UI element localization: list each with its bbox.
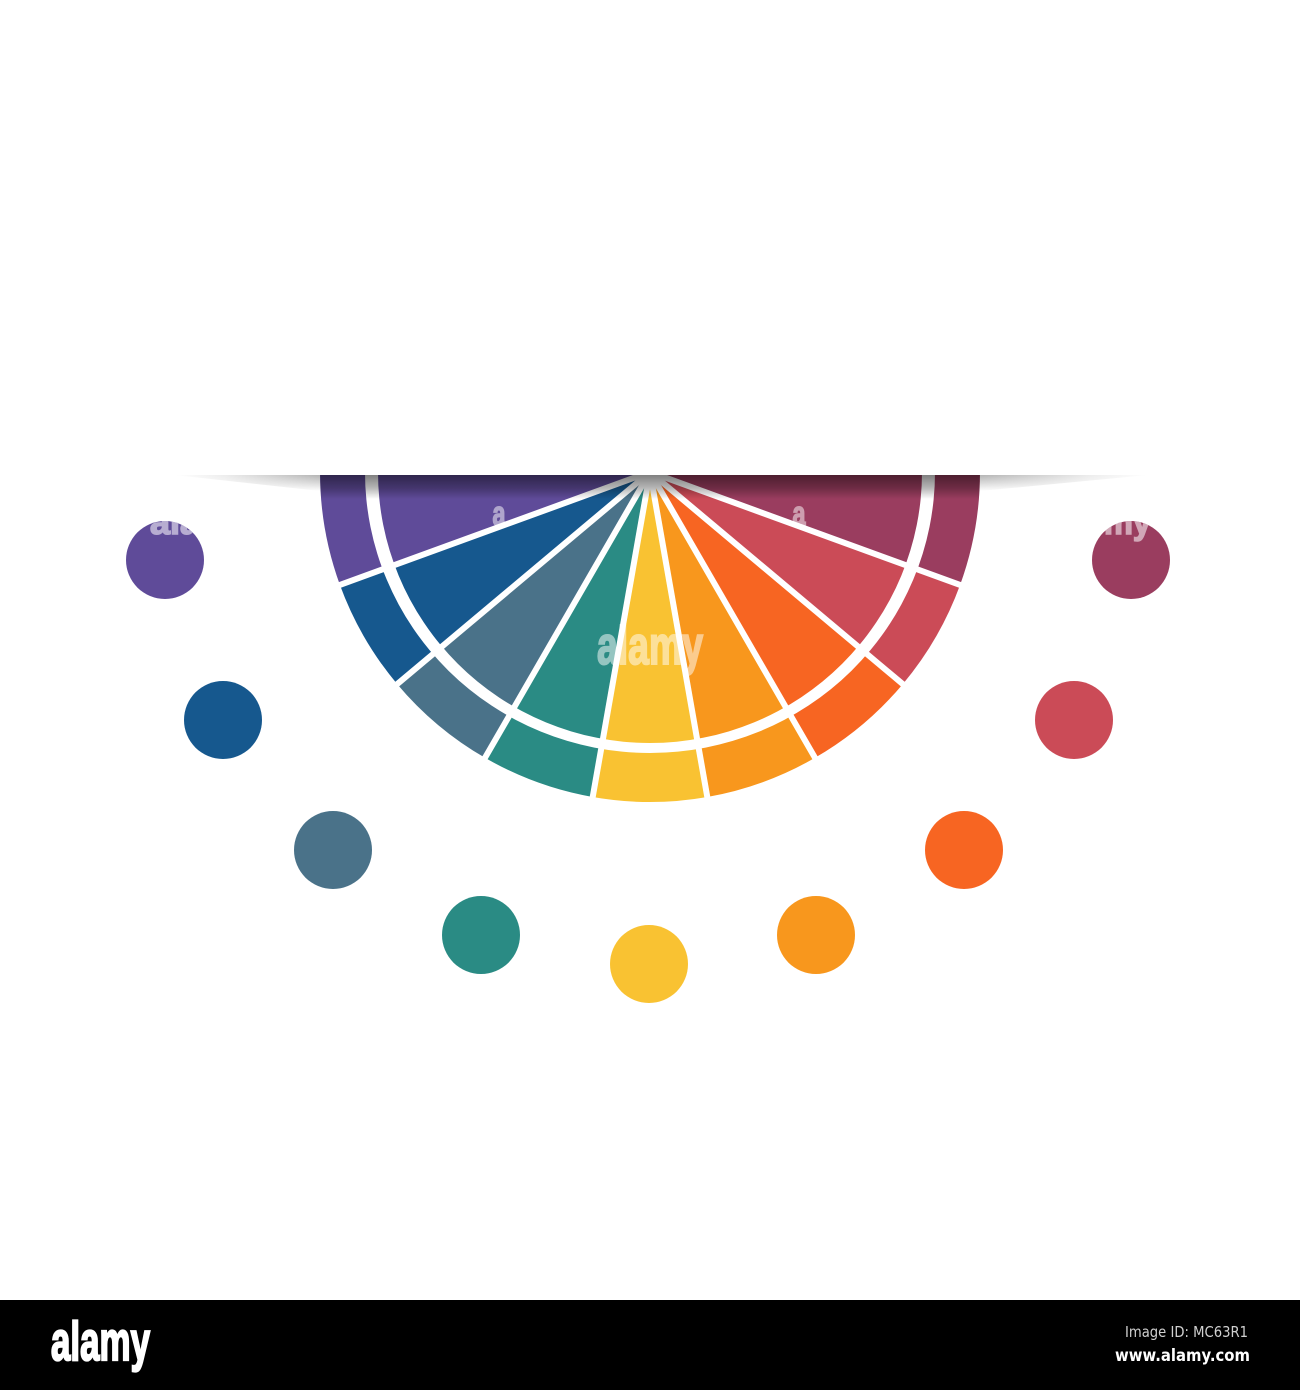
white cover panel <box>0 0 1300 475</box>
segment: orange <box>650 472 903 758</box>
segment: maroon <box>650 472 980 585</box>
dot: yellow <box>610 925 688 1003</box>
semicircular wheel <box>320 475 980 802</box>
ring separator <box>365 191 935 753</box>
footer bar <box>0 1300 1300 1390</box>
footer logo: alamy <box>51 1310 150 1372</box>
dot: purple: ala <box>150 504 201 542</box>
segment: amber <box>650 472 815 797</box>
dot: amber <box>777 896 855 974</box>
shadow on wheel <box>320 475 980 499</box>
segment: teal <box>485 472 650 797</box>
dot: maroon <box>1092 521 1170 599</box>
dot: red <box>1035 681 1113 759</box>
segment: purple <box>320 472 650 585</box>
segment: red <box>650 472 960 684</box>
dot: teal <box>442 896 520 974</box>
dot: blue <box>184 681 262 759</box>
spokes <box>336 472 964 801</box>
image id: Image ID: MC63R1 <box>1125 1323 1248 1341</box>
watermark: wedge letter left: a <box>492 495 506 533</box>
website: www.alamy.com <box>1115 1346 1250 1366</box>
watermark: wedge letter right: a <box>792 495 806 533</box>
watermark: center: alamy <box>597 616 703 676</box>
panel edge shadow left <box>175 474 320 492</box>
panel edge shadow right <box>980 474 1148 492</box>
dot: orange <box>925 811 1003 889</box>
segment: slate <box>397 472 650 758</box>
dot: maroon: my <box>1104 504 1151 542</box>
segment: blue <box>340 472 650 684</box>
dot: purple <box>126 521 204 599</box>
segment: yellow <box>593 472 707 802</box>
dot: slate <box>294 811 372 889</box>
